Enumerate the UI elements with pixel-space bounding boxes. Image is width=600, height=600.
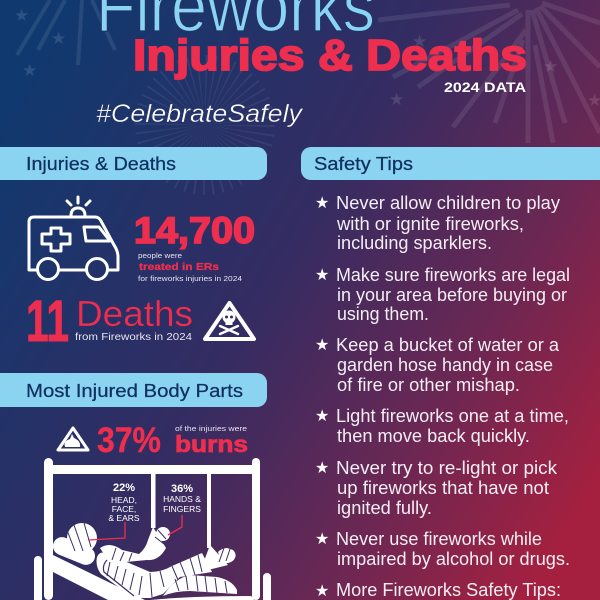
safety tips list: ignited fully. xyxy=(337,498,432,518)
icon: skull warning triangle xyxy=(205,303,254,339)
stat: 14,700 treated in ERs: people were xyxy=(138,253,182,260)
heading: Safety Tips xyxy=(301,147,600,180)
text: ★ xyxy=(14,6,29,25)
safety tips list: Make sure fireworks are legal xyxy=(336,265,570,285)
safety tips list: More Fireworks Safety Tips: xyxy=(336,580,561,600)
label: head, face and ears 22%: FACE, xyxy=(112,504,136,514)
safety tips list: Never allow children to play xyxy=(336,193,560,213)
label: hands and fingers 36%: HANDS & xyxy=(163,494,201,504)
label: head, face and ears 22%: HEAD, xyxy=(111,495,137,505)
safety tips list: including sparklers. xyxy=(337,233,492,253)
pillow xyxy=(50,534,98,568)
label: hands and fingers 36%: FINGERS xyxy=(163,504,201,514)
heading: Most Injured Body Parts xyxy=(0,373,267,407)
mattress and blanket xyxy=(47,555,254,600)
heading: Injuries & Deaths: Injuries & Deaths xyxy=(26,154,176,174)
safety tips list: ★ xyxy=(315,583,329,600)
text: ★ xyxy=(389,90,404,109)
safety tips list: in your area before buying or xyxy=(337,285,567,305)
label: head, face and ears 22% xyxy=(108,482,140,523)
stat: 14,700 treated in ERs xyxy=(134,210,255,283)
label: hands and fingers 36% xyxy=(163,483,201,514)
safety tips list: garden hose handy in case xyxy=(337,355,553,375)
safety tips list: then move back quickly. xyxy=(337,426,530,446)
stat: 11 deaths xyxy=(26,289,193,354)
text: ★ xyxy=(543,57,558,76)
illustration: patient in hospital bed xyxy=(34,458,271,600)
icon: burn warning triangle xyxy=(58,428,88,450)
label: head, face and ears 22%: 22% xyxy=(113,482,135,494)
stat: 37% burns: 37% xyxy=(97,421,161,460)
stat: 14,700 treated in ERs: treated in ERs xyxy=(139,261,219,273)
safety tips list: Never try to re-light or pick xyxy=(336,458,558,478)
safety tips list: impaired by alcohol or drugs. xyxy=(337,549,570,569)
title line: Injuries & Deaths: Injuries & Deaths xyxy=(133,31,527,80)
safety tips list: Light fireworks one at a time, xyxy=(336,406,569,426)
safety tips list xyxy=(315,193,570,600)
bandaged arm xyxy=(100,527,166,562)
safety tips list: ★ xyxy=(315,267,329,284)
heading: Most Injured Body Parts: Most Injured Body Parts xyxy=(26,381,243,401)
heading: Injuries & Deaths xyxy=(0,147,267,180)
stat: 14,700 treated in ERs: 14,700 xyxy=(134,210,255,251)
leader lines xyxy=(88,515,182,540)
stat: 37% burns: burns xyxy=(175,431,248,457)
icon: ambulance xyxy=(29,197,118,280)
hashtag: #CelebrateSafely xyxy=(96,100,304,128)
label: hands and fingers 36%: 36% xyxy=(171,483,193,495)
text: ★ xyxy=(51,29,66,48)
stat: 14,700 treated in ERs: for fireworks injuries in 2024 xyxy=(138,276,242,283)
safety tips list: ★ xyxy=(315,531,329,548)
safety tips list: ★ xyxy=(315,460,329,477)
stat: 37% burns: of the injuries were xyxy=(175,424,247,433)
safety tips list: Keep a bucket of water or a xyxy=(336,335,560,355)
heading: Safety Tips: Safety Tips xyxy=(314,154,413,174)
safety tips list: up fireworks that have not xyxy=(337,478,549,498)
title xyxy=(96,0,527,95)
safety tips list: with or ignite fireworks, xyxy=(336,214,524,234)
safety tips list: ★ xyxy=(315,408,329,425)
stat: 11 deaths: 11 xyxy=(26,289,69,354)
safety tips list: using them. xyxy=(337,304,429,324)
safety tips list: of fire or other mishap. xyxy=(337,375,520,395)
safety tips list: Never use fireworks while xyxy=(336,529,542,549)
text: ★ xyxy=(412,32,427,51)
stat: 37% burns xyxy=(97,421,248,460)
safety tips list: ★ xyxy=(315,195,329,212)
stat: 11 deaths: Deaths xyxy=(76,293,193,334)
label: head, face and ears 22%: & EARS xyxy=(108,513,140,523)
data year: 2024 DATA xyxy=(444,79,526,95)
text: ★ xyxy=(22,61,37,80)
safety tips list: ★ xyxy=(315,337,329,354)
stat: 11 deaths: from Fireworks in 2024 xyxy=(75,332,192,343)
bandaged torso and legs xyxy=(96,545,237,598)
